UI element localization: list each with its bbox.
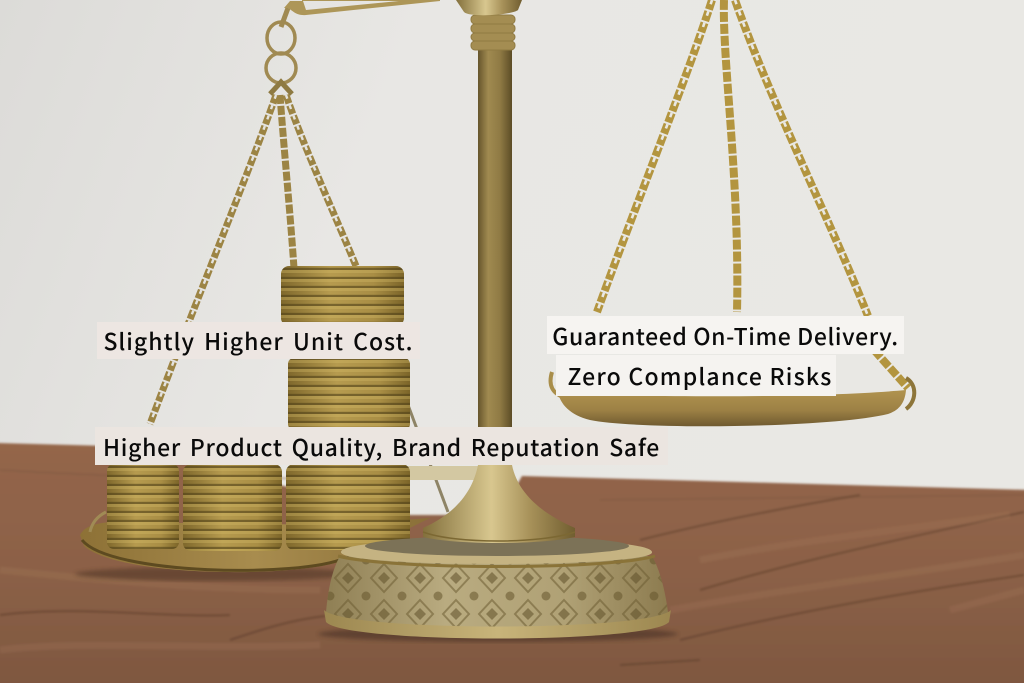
stack: bottom right bbox=[286, 464, 410, 550]
coin stacks bbox=[107, 266, 410, 551]
left pan bbox=[80, 512, 430, 572]
stack: front middle bbox=[183, 464, 282, 551]
label: guaranteed on-time delivery: Guaranteed On-Time Delivery. bbox=[552, 318, 899, 352]
wooden table bbox=[0, 443, 1024, 683]
left pan shadow bbox=[75, 567, 355, 581]
right pan chains bbox=[597, 0, 908, 388]
stack: tall middle bbox=[288, 358, 410, 430]
label: slightly higher unit cost: Slightly Higher Unit Cost. bbox=[103, 323, 414, 357]
pole collar bbox=[471, 15, 515, 50]
wall background bbox=[0, 0, 1024, 540]
left hook links bbox=[266, 8, 296, 94]
central pole bbox=[456, 0, 522, 432]
stack: tall top bbox=[281, 266, 404, 326]
beam bbox=[284, 0, 440, 15]
stack: front left bbox=[107, 464, 179, 549]
left pan chains bbox=[150, 95, 448, 512]
pivot head bbox=[456, 0, 522, 15]
far edge of left pan bbox=[408, 466, 490, 480]
label: higher product quality: Higher Product Quality, Brand Reputation Safe bbox=[103, 428, 660, 462]
scale base bbox=[324, 536, 671, 638]
label: zero compliance risks: Zero Complance Risks bbox=[567, 358, 833, 392]
right pan bbox=[551, 372, 914, 426]
base shadow bbox=[318, 626, 678, 642]
pole cone bbox=[423, 465, 575, 543]
